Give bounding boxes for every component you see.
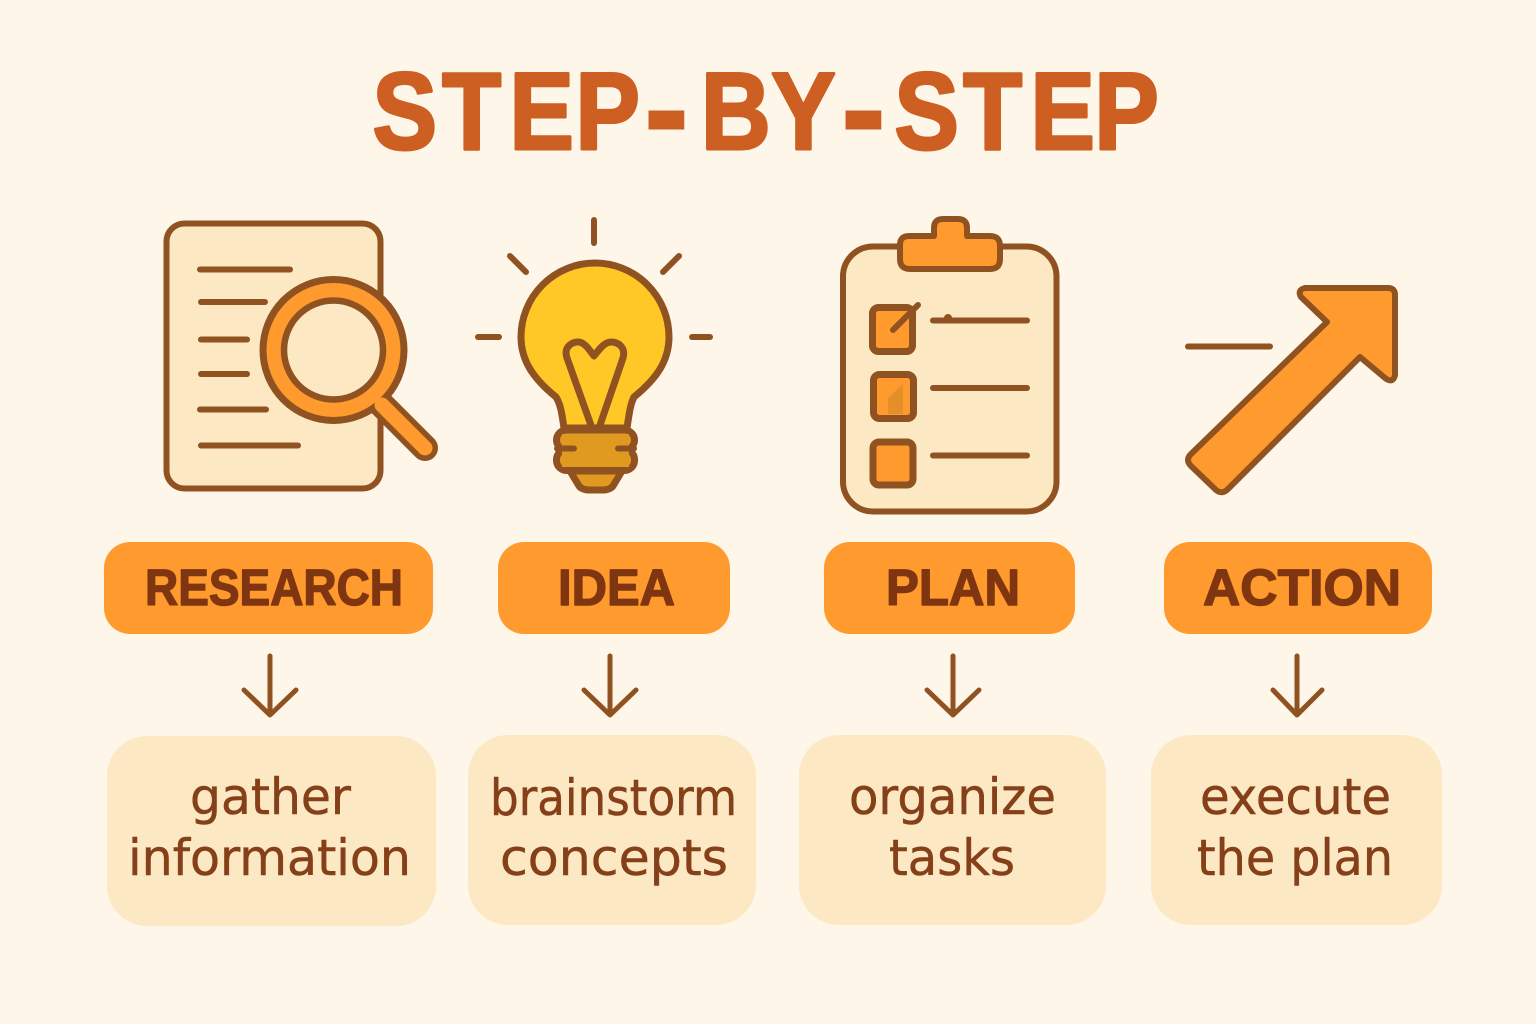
title: S xyxy=(373,49,437,172)
description: gather information xyxy=(107,736,436,926)
step label: plan: PLAN xyxy=(886,559,1020,616)
bulb base xyxy=(556,430,634,490)
step label: idea: IDEA xyxy=(558,559,675,616)
description: organize tasks: tasks xyxy=(889,829,1015,887)
icon: light bulb xyxy=(478,220,710,490)
title: B xyxy=(701,49,771,172)
title: Y xyxy=(771,49,836,172)
description: organize tasks: organize xyxy=(849,768,1056,826)
description: execute the plan: the plan xyxy=(1197,829,1393,887)
step label: action: ACTION xyxy=(1203,559,1401,616)
description: gather information: information xyxy=(128,829,411,887)
icon: document with magnifying glass xyxy=(166,224,425,488)
description: brainstorm concepts: brainstorm xyxy=(490,769,737,827)
description: execute the plan xyxy=(1151,735,1442,925)
title: T xyxy=(442,49,501,172)
title: E xyxy=(1030,49,1095,172)
icon: clipboard checklist xyxy=(843,219,1056,512)
arrow shape xyxy=(1188,288,1395,492)
description: execute the plan: execute xyxy=(1200,768,1391,826)
title: - xyxy=(643,17,690,195)
description: organize tasks xyxy=(799,735,1106,925)
title: S xyxy=(894,49,959,172)
checkbox one xyxy=(872,305,918,352)
step label: plan xyxy=(824,542,1075,634)
arrow dash xyxy=(1188,344,1270,350)
checklist lines xyxy=(933,320,1027,456)
description: brainstorm concepts: concepts xyxy=(500,829,728,887)
bulb glass xyxy=(521,263,669,428)
step label: idea xyxy=(498,542,730,634)
title: P xyxy=(575,49,640,172)
title: P xyxy=(1094,49,1159,172)
step label: research xyxy=(104,542,433,634)
magnifying glass xyxy=(263,280,425,448)
arrow: idea down xyxy=(584,656,636,715)
title: E xyxy=(509,49,574,172)
description: gather information: gather xyxy=(190,768,351,826)
description: brainstorm concepts xyxy=(468,735,756,925)
step label: research: RESEARCH xyxy=(145,559,403,616)
icon: upward arrow xyxy=(1188,288,1395,492)
title: T xyxy=(963,49,1022,172)
document text lines xyxy=(200,270,298,446)
bulb filament xyxy=(566,342,624,428)
checkbox three xyxy=(873,442,913,485)
clipboard clip xyxy=(900,219,1000,269)
arrow: research down xyxy=(244,656,296,715)
bulb rays xyxy=(478,220,710,337)
title: - xyxy=(840,17,887,195)
arrow: action down xyxy=(1273,656,1322,715)
arrow: plan down xyxy=(927,656,979,715)
checkbox two xyxy=(874,374,914,418)
clipboard board xyxy=(843,246,1056,512)
document page xyxy=(166,224,380,488)
step label: action xyxy=(1164,542,1432,634)
